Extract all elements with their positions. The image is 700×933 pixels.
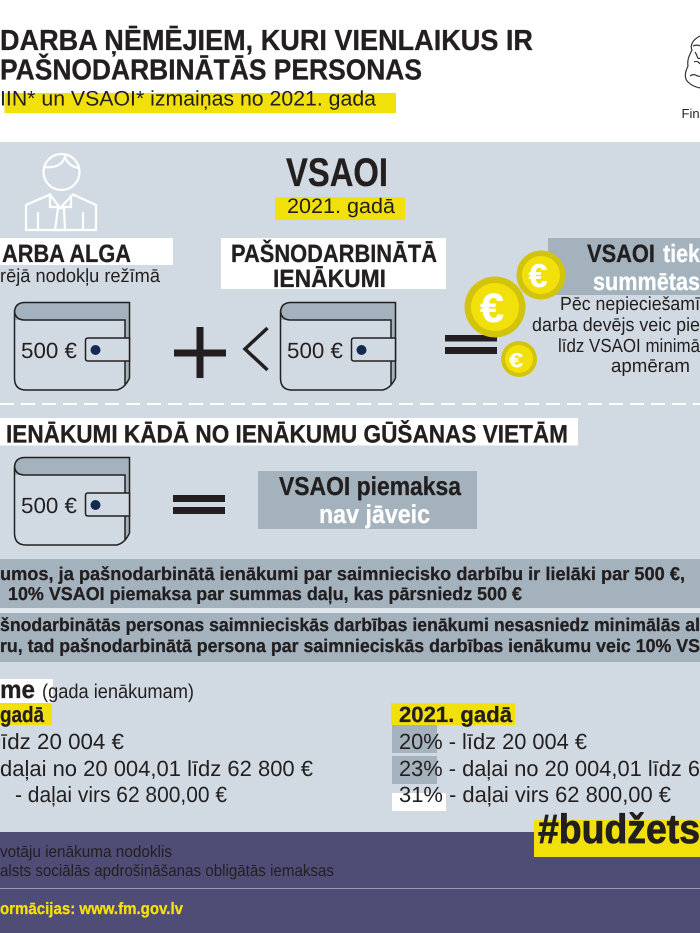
icon: wallet left (14, 302, 130, 390)
note band: above 500 euro: umos, ja pašnodarbinātā ienākumi par saimniecisko darbību ir lielāki par 500 €, (0, 563, 685, 584)
icon: equals lower (173, 495, 225, 514)
note band: above 500 euro (0, 559, 700, 608)
icon: equals (445, 335, 497, 354)
table: previous year rates: daļai no 20 004,01 līdz 62 800 € (0, 756, 313, 781)
icon: person (26, 154, 96, 230)
callout: VSAOI tiek summētas: VSAOI (587, 240, 655, 268)
panel: main background (0, 142, 700, 832)
label: pašnodarbinātā ienākumi: IENĀKUMI (273, 265, 386, 293)
text block: minimum contribution note: apmēram (611, 356, 690, 377)
table: 2021 rates: 31% - daļai virs 62 800,00 € (399, 782, 671, 807)
table: previous year rates: īdz 20 004 € (1, 729, 124, 754)
callout: VSAOI piemaksa nav jāveic: nav jāveic (319, 499, 430, 529)
title (0, 25, 533, 86)
panel: footer (0, 832, 700, 933)
icon: wallet middle (280, 302, 396, 390)
icon: euro coins (464, 250, 566, 377)
heading: IIN likme (0, 676, 194, 704)
icon: wallet left: 500 € (21, 338, 77, 363)
logo: ministry crest (682, 36, 700, 121)
table: 2021 rates (391, 702, 700, 811)
title: PAŠNODARBINĀTĀS PERSONAS (0, 54, 422, 86)
heading: VSAOI: VSAOI (286, 151, 388, 195)
title: DARBA ŅĒMĒJIEM, KURI VIENLAIKUS IR (0, 25, 533, 57)
year badge: 2021. gadā: 2021. gadā (287, 195, 395, 218)
table: previous year rates (0, 702, 313, 807)
icon: wallet lower (14, 458, 130, 545)
footer link: ormācijas: www.fm.gov.lv (0, 900, 184, 918)
strip between notes (0, 608, 700, 613)
note band: below minimum wage (0, 613, 700, 662)
label: darba alga: ARBA ALGA (2, 240, 131, 268)
callout: VSAOI piemaksa nav jāveic: VSAOI piemaksa (279, 471, 461, 501)
icon: less than (245, 328, 268, 370)
table: previous year rates: gadā (0, 702, 45, 727)
icon: plus (174, 327, 226, 378)
table: 2021 rates: 20% - līdz 20 004 € (399, 729, 587, 754)
icon: euro coins: € (480, 285, 504, 331)
label: darba alga: rējā nodokļu režīmā (0, 266, 160, 287)
icon: euro coins: € (509, 350, 523, 372)
text block: minimum contribution note (532, 294, 700, 377)
label: pašnodarbinātā ienākumi (221, 238, 446, 293)
heading: IIN likme: me (0, 676, 35, 704)
subtitle: IIN* un VSAOI* izmaiņas no 2021. gada (0, 88, 376, 110)
heading: IIN likme: (gada ienākumam) (42, 681, 194, 703)
icon: wallet lower: 500 € (21, 493, 77, 518)
callout: VSAOI piemaksa nav jāveic (258, 471, 477, 529)
note band: above 500 euro: 10% VSAOI piemaksa par summas daļu, kas pārsniedz 500 € (8, 583, 522, 605)
table: previous year rates: - daļai virs 62 800,00 € (15, 782, 227, 807)
table: 2021 rates: 2021. gadā (399, 702, 513, 727)
callout: VSAOI tiek summētas (548, 238, 700, 296)
label: darba alga (0, 238, 173, 287)
footer definitions: alsts sociālās apdrošināšanas obligātās iemaksas (0, 862, 334, 880)
footer definitions: votāju ienākuma nodoklis (0, 843, 172, 861)
icon: euro coins: € (528, 257, 548, 294)
footer definitions (0, 843, 334, 880)
label: pašnodarbinātā ienākumi: PAŠNODARBINĀTĀ (231, 239, 437, 268)
icon: wallet middle: 500 € (287, 338, 343, 363)
heading: ienākumi kādā no vietām: IENĀKUMI KĀDĀ NO IENĀKUMU GŪŠANAS VIETĀM (6, 420, 568, 448)
table: 2021 rates: 23% - daļai no 20 004,01 līdz 6 (399, 756, 700, 781)
